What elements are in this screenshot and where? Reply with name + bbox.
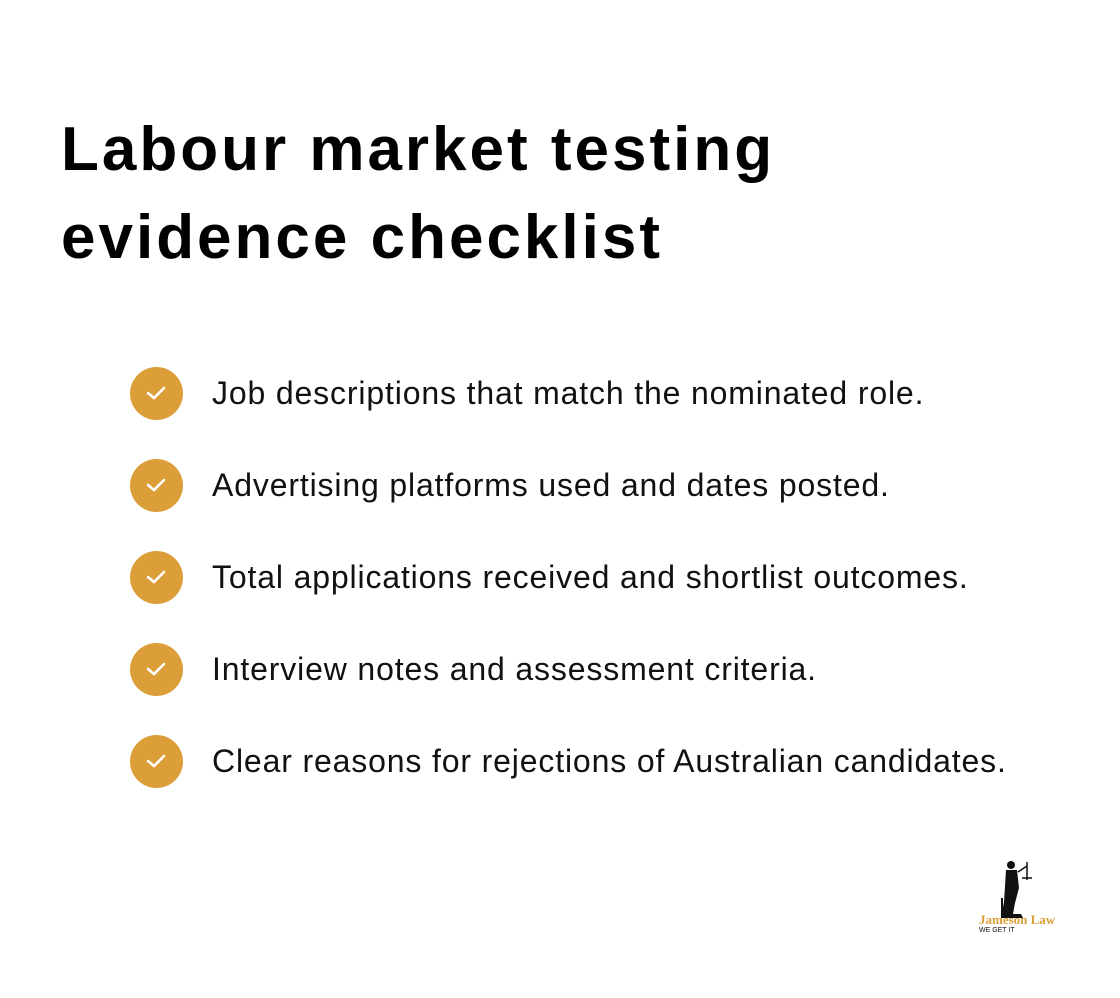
checklist item 1: Job descriptions that match the nominated role. (212, 375, 924, 411)
title: Labour market testing (61, 115, 775, 184)
logo: Jameson Law: WE GET IT (979, 927, 1015, 934)
checklist item 4: Interview notes and assessment criteria. (212, 651, 817, 687)
checklist item 5: Clear reasons for rejections of Australian candidates. (212, 743, 1007, 779)
checklist item 3: Total applications received and shortlist outcomes. (212, 559, 969, 595)
checklist item 2: Advertising platforms used and dates posted. (212, 467, 890, 503)
logo: Jameson Law (979, 861, 1056, 934)
title (61, 115, 775, 272)
logo: Jameson Law: Jameson Law (979, 912, 1056, 927)
checklist item 5 (130, 735, 1007, 788)
checklist item 1 (130, 367, 924, 420)
checklist item 4 (130, 643, 817, 696)
checklist item 3 (130, 551, 969, 604)
title: evidence checklist (61, 203, 663, 272)
checklist item 2 (130, 459, 890, 512)
